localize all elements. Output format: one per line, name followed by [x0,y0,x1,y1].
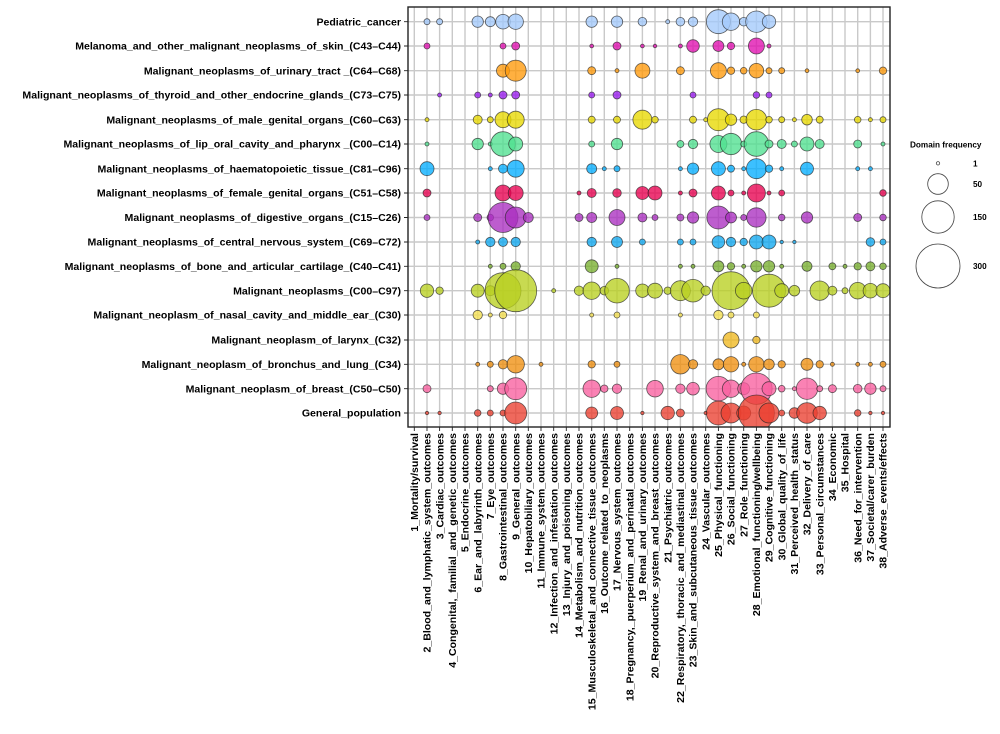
bubbles: Larynx [723,332,760,348]
legend key: 150 [922,201,987,233]
x-axis labels: outcome domains: 19_Renal_and_urinary_outcomes [637,433,649,601]
x-axis labels: outcome domains: 20_Reproductive_system_and_breast_outcomes [650,433,662,678]
x-axis labels: outcome domains: 14_Metabolism_and_nutrition_outcomes [574,433,586,638]
x-axis labels: outcome domains [409,433,890,710]
x-axis labels: outcome domains: 5_Endocrine_outcomes [460,433,472,552]
x-axis labels: outcome domains: 34_Economic [827,433,839,501]
x-axis labels: outcome domains: 3_Cardiac_outcomes [434,433,446,539]
x-axis labels: outcome domains: 27_Role_functioning [738,433,750,537]
x-axis labels: outcome domains: 28_Emotional_functioning/wellbeing [751,433,763,616]
x-axis labels: outcome domains: 37_Societal/carer_burden [865,433,877,562]
axis ticks [404,22,883,431]
legend title: Domain frequency [910,140,982,150]
y-axis labels: cancer populations: Malignant_neoplasms_of_bone_and_articular_cartilage_(C40–C41) [65,261,401,273]
bubbles: Nasal cavity and middle ear [473,310,759,320]
x-axis labels: outcome domains: 10_Hepatobiliary_outcomes [523,433,535,573]
legend key: 50: 50 [973,180,983,189]
bubbles: Bone and articular cartilage [488,260,886,273]
bubbles: Malignant neoplasms C00-C97 [420,270,890,312]
x-axis labels: outcome domains: 22_Respiratory,_thoracic_and_mediastinal_outcomes [675,433,687,703]
y-axis labels: cancer populations: General_population [302,408,401,420]
bubbles: Female genital [423,184,886,202]
x-axis labels: outcome domains: 13_Injury_and_poisoning_outcomes [561,433,573,616]
y-axis labels: cancer populations [22,16,401,420]
legend key: 1: 1 [973,159,978,168]
x-axis labels: outcome domains: 21_Psychiatric_outcomes [662,433,674,563]
x-axis labels: outcome domains: 24_Vascular_outcomes [700,433,712,550]
legend key: 300 [916,244,987,288]
bubbles: Thyroid [438,91,772,99]
y-axis labels: cancer populations: Malignant_neoplasms_of_thyroid_and_other_endocrine_glands_(C73–C75) [22,90,401,102]
x-axis labels: outcome domains: 23_Skin_and_subcutaneous_tissue_outcomes [688,433,700,667]
x-axis labels: outcome domains: 15_Musculoskeletal_and_connective_tissue_outcomes [586,433,598,710]
bubbles: Male genital [425,109,886,131]
y-axis labels: cancer populations: Malignant_neoplasm_of_nasal_cavity_and_middle_ear_(C30) [93,310,401,322]
y-axis labels: cancer populations: Malignant_neoplasms_of_haematopoietic_tissue_(C81–C96) [98,163,401,175]
x-axis labels: outcome domains: 8_Gastrointestinal_outcomes [498,433,510,581]
x-axis labels: outcome domains: 16_Outcome_related_to_neoplasms [599,433,611,614]
x-axis labels: outcome domains: 12_Infection_and_infestation_outcomes [548,433,560,634]
y-axis labels: cancer populations: Malignant_neoplasm_of_breast_(C50–C50) [186,383,401,395]
legend key: 300: 300 [973,262,987,271]
bubbles: Breast [423,373,886,404]
x-axis labels: outcome domains: 4_Congenital,_familial_and_genetic_outcomes [447,433,459,668]
y-axis labels: cancer populations: Malignant_neoplasms_of_digestive_organs_(C15–C26) [125,212,401,224]
bubble chart [420,10,890,431]
legend key: 1 [936,159,978,168]
x-axis labels: outcome domains: 17_Nervous_system_outcomes [612,433,624,591]
x-axis labels: outcome domains: 11_Immune_system_outcomes [536,433,548,589]
y-axis labels: cancer populations: Pediatric_cancer [316,16,401,28]
grid lines [408,7,890,427]
x-axis labels: outcome domains: 2_Blood_and_lymphatic_system_outcomes [422,433,434,653]
x-axis labels: outcome domains: 30_Global_quality_of_life [776,433,788,560]
x-axis labels: outcome domains: 36_Need_for_intervention [852,433,864,563]
bubbles: Urinary tract [496,60,887,81]
y-axis labels: cancer populations: Malignant_neoplasms_of_female_genital_organs_(C51–C58) [97,188,401,200]
x-axis labels: outcome domains: 29_Cognitive_functioning [764,433,776,562]
legend key: 150: 150 [973,213,987,222]
y-axis labels: cancer populations: Malignant_neoplasms_of_urinary_tract _(C64–C68) [144,65,401,77]
bubbles: General population [424,394,886,426]
x-axis labels: outcome domains: 38_Adverse_events/effects [878,433,890,569]
plot frame [408,7,890,427]
x-axis labels: outcome domains: 9_General_outcomes [510,433,522,540]
x-axis labels: outcome domains: 6_Ear_and_labyrinth_outcomes [472,433,484,593]
legend: domain frequency [910,140,987,288]
y-axis labels: cancer populations: Malignant_neoplasm_of_larynx_(C32) [211,335,401,347]
legend key: 50 [928,174,983,194]
x-axis labels: outcome domains: 18_Pregnancy,_puerperium_and_perinatal_outcomes [624,433,636,701]
x-axis labels: outcome domains: 35_Hospital [840,433,852,492]
bubbles: Central nervous system [476,235,886,249]
x-axis labels: outcome domains: 31_Perceived_health_status [789,433,801,575]
y-axis labels: cancer populations: Malignant_neoplasm_of_bronchus_and_lung_(C34) [142,359,401,371]
y-axis labels: cancer populations: Malignant_neoplasms_(C00–C97) [233,285,401,297]
y-axis labels: cancer populations: Melanoma_and_other_malignant_neoplasms_of_skin_(C43–C44) [75,41,401,53]
y-axis labels: cancer populations: Malignant_neoplasms_of_lip_oral_cavity_and_pharynx _(C00–C14) [63,139,401,151]
bubbles: Pediatric cancer [424,10,776,34]
x-axis labels: outcome domains: 32_Delivery_of_care [802,433,814,535]
bubbles: Haematopoietic tissue [420,159,872,179]
bubbles: Melanoma [424,38,771,54]
x-axis labels: outcome domains: 26_Social_functioning [726,433,738,545]
bubbles: Bronchus and lung [476,355,886,374]
x-axis labels: outcome domains: 7_Eye_outcomes [485,433,497,519]
bubbles: Lip, oral cavity and pharynx [425,132,885,156]
x-axis labels: outcome domains: 33_Personal_circumstances [814,433,826,575]
x-axis labels: outcome domains: 25_Physical_functioning [713,433,725,557]
bubbles: Digestive [424,202,886,232]
y-axis labels: cancer populations: Malignant_neoplasms_of_male_genital_organs_(C60–C63) [106,114,401,126]
y-axis labels: cancer populations: Malignant_neoplasms_of_central_nervous_system_(C69–C72) [88,237,401,249]
x-axis labels: outcome domains: 1_Mortality/survival [409,433,421,532]
